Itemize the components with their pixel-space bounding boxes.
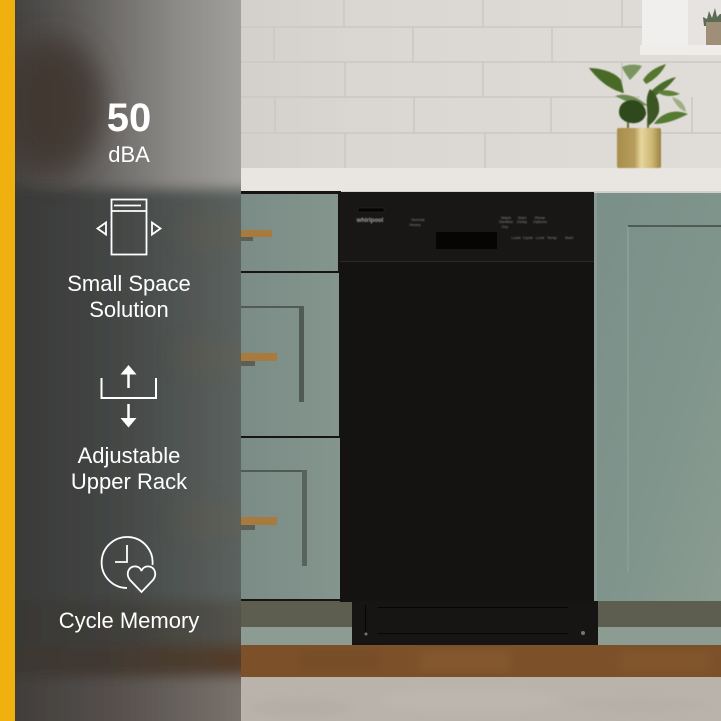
toe kick [241,601,721,645]
background: tiled wall [0,0,721,170]
label: cycle memory: Cycle Memory [59,608,199,633]
blurred side panel [15,0,241,721]
brand and control labels: Heavy [409,222,421,227]
blurred handles [180,228,265,526]
wood floor [241,645,721,677]
dishwasher [340,192,594,602]
feature: adjustable upper rack [71,365,188,494]
brand and control labels [356,215,574,240]
brand and control labels: Wash [501,215,511,220]
brand and control labels: Load [512,235,520,240]
right cabinet door [594,193,721,601]
left cabinet drawers [241,191,341,601]
brand and control labels: whirlpool [356,218,384,224]
icon: dishwasher with side arrows [98,200,160,254]
countertop [241,168,721,191]
label: adjustable upper rack: Adjustable [78,443,180,468]
rug [241,677,721,721]
feature: small space solution [67,200,191,322]
potted plant [589,64,688,168]
wall shelf with small plant [640,0,721,55]
control panel display [436,232,497,249]
brand and control labels: Dry [502,224,508,229]
brand and control labels: Sanitize [499,219,514,224]
kick plate [352,601,598,645]
feature: 50 dBA: dBA [108,142,150,167]
brand and control labels: Options [533,219,547,224]
feature: 50 dBA [107,96,151,167]
feature: 50 dBA: 50 [107,96,151,140]
label: small space solution: Small Space [67,271,191,296]
label: small space solution: Solution [89,297,169,322]
yellow accent bar [0,0,15,721]
icon: clock with heart [102,537,155,592]
brand and control labels: Cycle [523,235,534,240]
brand and control labels: Lock [536,235,544,240]
brand and control labels: Normal [412,217,425,222]
brand and control labels: Temp [547,235,558,240]
icon: rack with up and down arrows [102,365,156,428]
brand and control labels: Delay [517,219,527,224]
brand and control labels: Start [565,235,574,240]
vent slots [358,208,384,212]
brand and control labels: Start [518,215,527,220]
label: adjustable upper rack: Upper Rack [71,469,188,494]
feature: cycle memory [59,537,199,633]
brand and control labels: Rinse [535,215,546,220]
